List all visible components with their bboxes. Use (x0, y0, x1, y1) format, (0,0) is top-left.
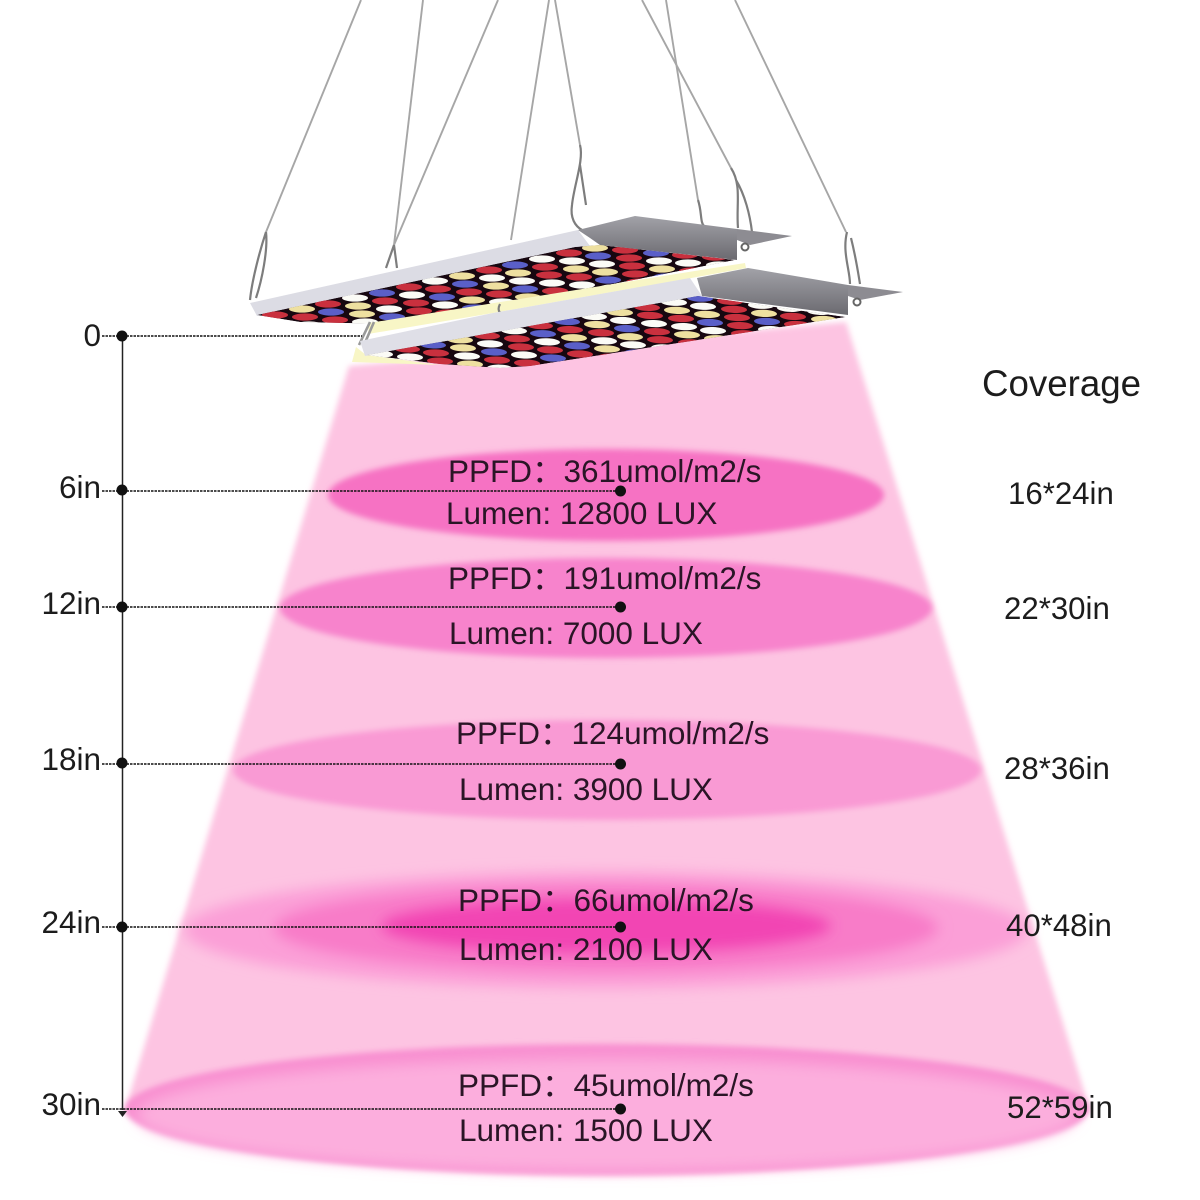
light pool: 18in (233, 720, 981, 820)
upper panel flange (737, 229, 792, 245)
coverage column: 22*30in (1004, 591, 1110, 626)
light pool: 30in (125, 1044, 1089, 1174)
readings at 24in: Lumen: 2100 LUX (459, 931, 713, 967)
readings at 6in: Lumen: 12800 LUX (446, 495, 717, 531)
upper panel frame (250, 230, 590, 316)
lower panel (358, 232, 903, 368)
coverage column: 40*48in (1006, 908, 1112, 943)
hanging light panels (248, 144, 903, 368)
readings at 12in (448, 560, 761, 651)
readings at 30in (458, 1067, 754, 1148)
lower panel bracket (697, 268, 848, 315)
readings at 12in: Lumen: 7000 LUX (449, 615, 703, 651)
hanging wires (266, 0, 846, 245)
upper panel LED face (258, 245, 734, 324)
lower panel LED face (368, 296, 846, 368)
lower panel frame (360, 278, 702, 356)
coverage column: 16*24in (1008, 476, 1114, 511)
readings at 6in: PPFD：361umol/m2/s (448, 453, 761, 489)
height labels: 18in (41, 741, 101, 777)
readings at 18in: PPFD：124umol/m2/s (456, 715, 769, 751)
readings at 30in: Lumen: 1500 LUX (459, 1112, 713, 1148)
height labels: 6in (59, 469, 101, 505)
light beam cone (125, 322, 1090, 1176)
coverage column: 52*59in (1007, 1090, 1113, 1125)
yellow glow strip (368, 263, 746, 334)
coverage heading: Coverage (982, 363, 1141, 404)
readings at 18in (456, 715, 769, 807)
coverage column: 28*36in (1004, 751, 1110, 786)
upper panel bracket ring (742, 244, 748, 250)
height labels: 24in (41, 904, 101, 940)
lower panel flange (848, 285, 903, 300)
coverage column (982, 363, 1141, 1125)
light pool: 12in (280, 558, 932, 658)
yellow glow at lower panel (352, 347, 530, 368)
readings at 6in (446, 453, 761, 531)
lower panel bracket ring (854, 298, 860, 306)
readings at 18in: Lumen: 3900 LUX (459, 771, 713, 807)
height labels: 12in (41, 585, 101, 621)
light pool: 6in (328, 449, 884, 541)
readings at 24in (458, 882, 754, 967)
height labels: 0 (83, 317, 101, 353)
readings at 30in: PPFD：45umol/m2/s (458, 1067, 754, 1103)
height axis (102, 330, 626, 1117)
upper panel (248, 144, 792, 334)
height labels (41, 317, 101, 1122)
readings at 12in: PPFD：191umol/m2/s (448, 560, 761, 596)
height labels: 30in (41, 1086, 101, 1122)
readings at 24in: PPFD：66umol/m2/s (458, 882, 754, 918)
upper panel bracket (578, 216, 737, 260)
light pool: 24in (184, 872, 1028, 988)
